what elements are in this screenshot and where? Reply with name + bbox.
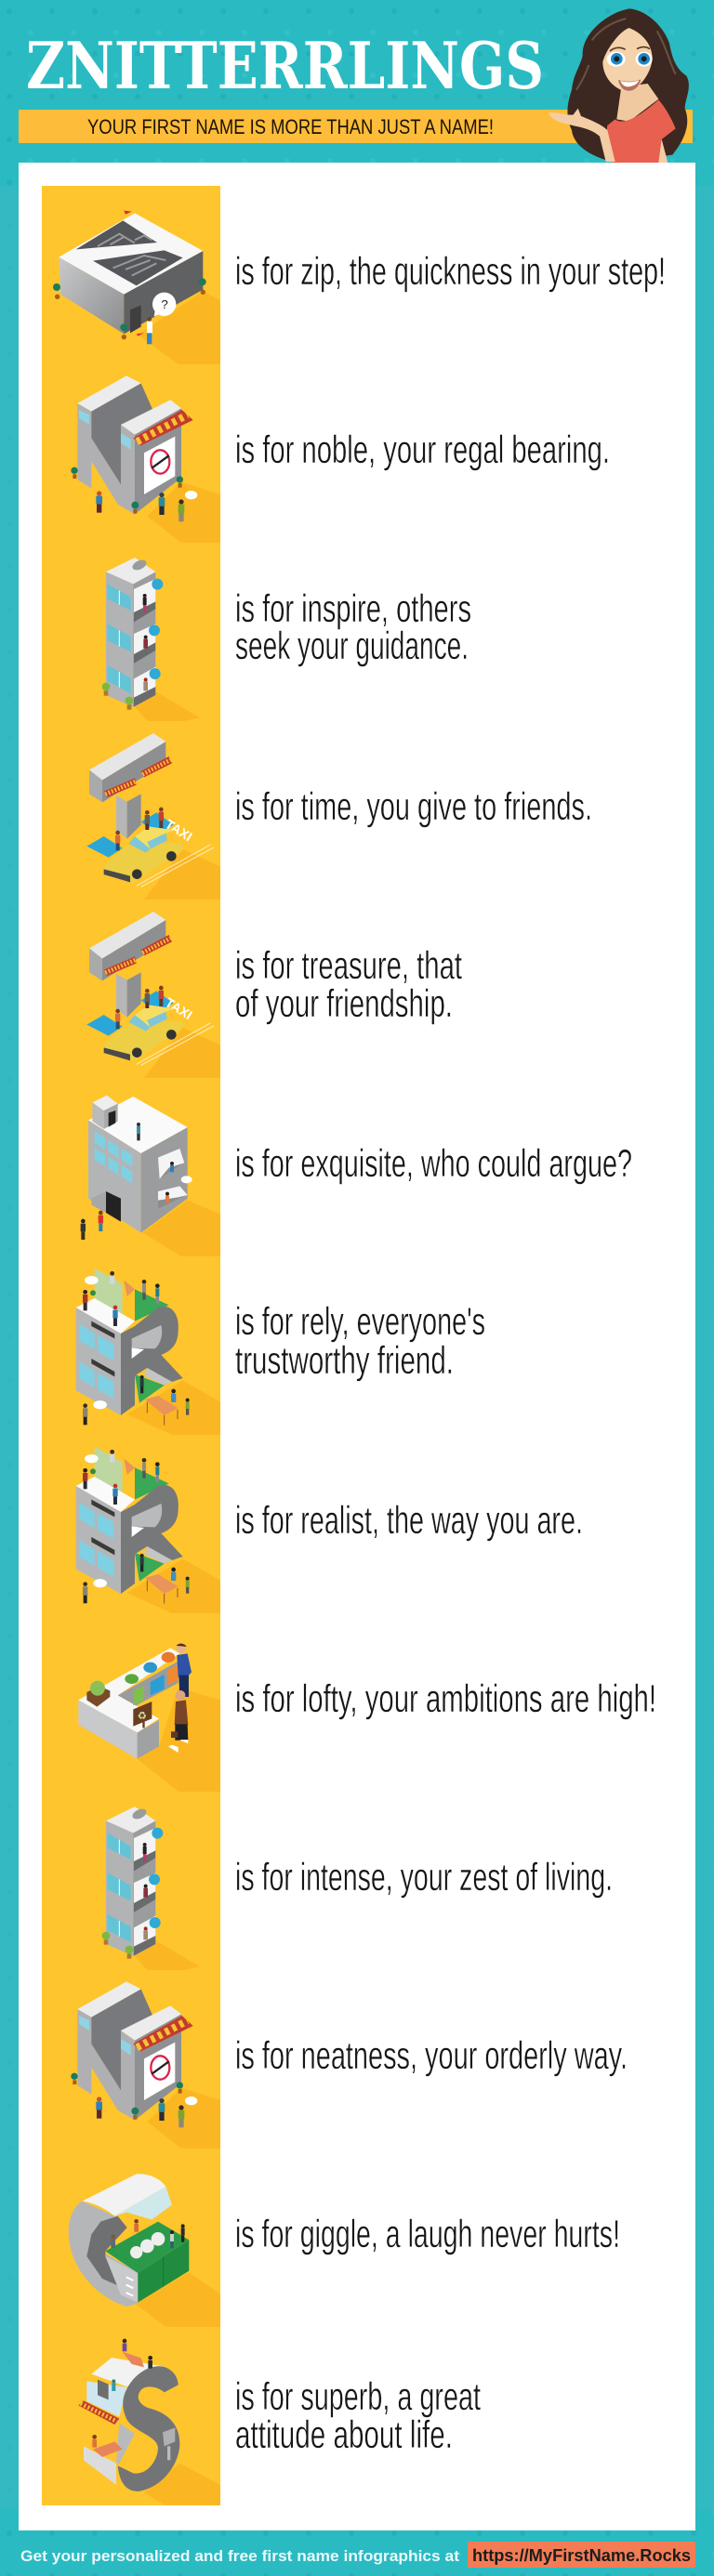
icon: R building xyxy=(76,1446,220,1613)
footer link badge xyxy=(468,2542,695,2568)
row R xyxy=(76,1268,485,1435)
text: of your friendship. xyxy=(235,981,453,1025)
row I xyxy=(102,558,471,721)
icon: cartoon woman xyxy=(549,8,689,163)
text: trustworthy friend. xyxy=(235,1338,454,1382)
row G xyxy=(69,2174,620,2327)
subtitle: YOUR FIRST NAME IS MORE THAN JUST A NAME! xyxy=(87,115,494,138)
row N xyxy=(71,375,610,543)
row T xyxy=(86,733,592,900)
row T2 xyxy=(86,912,462,1078)
icon: N building xyxy=(71,1981,220,2149)
text: seek your guidance. xyxy=(235,624,469,667)
row E xyxy=(81,1096,632,1256)
icon: I building xyxy=(102,1807,200,1970)
text: attitude about life. xyxy=(235,2412,453,2456)
row S xyxy=(78,2339,481,2505)
text: is for superb, a great xyxy=(235,2374,481,2418)
icon: R building xyxy=(76,1268,220,1435)
text xyxy=(235,586,471,667)
panel: yellow icon column xyxy=(42,186,220,2505)
row L xyxy=(78,1643,656,1792)
text xyxy=(235,943,462,1025)
icon: I building xyxy=(102,558,200,721)
icon: Z maze building xyxy=(53,211,220,364)
banner xyxy=(19,110,693,143)
icon: T taxi stand: TAXI xyxy=(163,816,195,844)
row Z xyxy=(53,211,666,364)
icon: Z maze building: ? xyxy=(161,297,168,311)
icon: L recycling counter xyxy=(78,1643,220,1792)
icon: T taxi stand: TAXI xyxy=(163,994,195,1022)
icon: L recycling counter: ♻ xyxy=(138,1709,147,1722)
footer link badge: https://MyFirstName.Rocks xyxy=(472,2546,691,2565)
footer text: Get your personalized and free first name infographics at xyxy=(20,2547,459,2565)
icon: T taxi stand xyxy=(86,733,220,900)
text: is for rely, everyone's xyxy=(235,1299,485,1343)
icon: S building xyxy=(78,2339,220,2505)
title: ZNITTERRLINGS xyxy=(26,29,544,104)
text: is for treasure, that xyxy=(235,943,462,987)
text xyxy=(235,2374,481,2456)
row N2 xyxy=(71,1981,628,2149)
text xyxy=(235,1299,485,1382)
row R2 xyxy=(76,1446,583,1613)
icon: E building xyxy=(81,1096,220,1256)
icon: T taxi stand xyxy=(86,912,220,1078)
text: is for inspire, others xyxy=(235,586,471,630)
row I2 xyxy=(102,1807,613,1970)
icon: G building xyxy=(69,2174,220,2327)
icon: N building xyxy=(71,375,220,543)
